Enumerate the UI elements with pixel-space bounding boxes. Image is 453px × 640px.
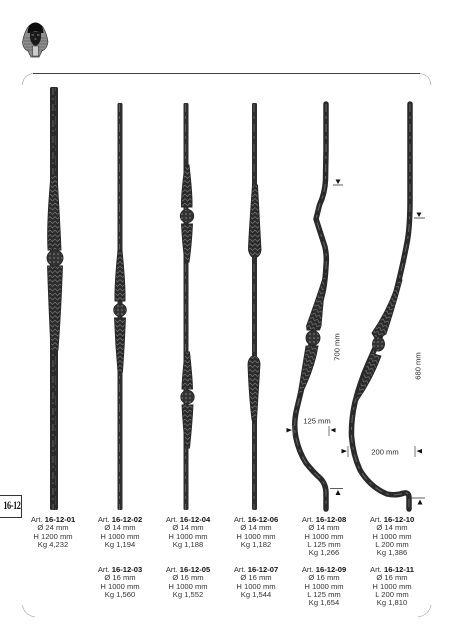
- label: 680 mm: 680 mm: [414, 352, 423, 380]
- rod 16-12-01: [47, 87, 63, 510]
- spec: 16-12-11: [370, 565, 414, 607]
- spec: 16-12-05: H 1000 mm: [168, 582, 208, 591]
- spec: 16-12-09: Art. 16-12-09: [302, 565, 346, 574]
- spec: 16-12-11: H 1000 mm: [372, 582, 412, 591]
- spec: 16-12-10: H 1000 mm: [372, 532, 412, 541]
- spec: 16-12-07: Ø 16 mm: [240, 573, 272, 582]
- spec: 16-12-11: L 200 mm: [375, 590, 409, 599]
- label: 700 mm: 700 mm: [333, 333, 342, 361]
- spec: 16-12-02: [98, 515, 142, 549]
- spec: 16-12-01: [31, 515, 75, 549]
- spec: 16-12-11: Art. 16-12-11: [370, 565, 414, 574]
- spec: 16-12-03: Ø 16 mm: [104, 573, 136, 582]
- spec: 16-12-06: Ø 14 mm: [240, 523, 272, 532]
- spec: 16-12-08: Kg 1,266: [309, 548, 339, 557]
- dimension marks: rod 08 height: [330, 180, 343, 495]
- spec: 16-12-11: Kg 1,810: [377, 598, 407, 607]
- spec: 16-12-10: L 200 mm: [375, 540, 409, 549]
- icon: pharaoh head: [22, 22, 48, 57]
- spec: 16-12-08: [302, 515, 346, 557]
- spec: 16-12-08: H 1000 mm: [304, 532, 344, 541]
- spec: 16-12-01: Ø 24 mm: [37, 523, 69, 532]
- rod 16-12-10 curved: [351, 104, 410, 509]
- spec: 16-12-10: Art. 16-12-10: [370, 515, 414, 524]
- spec: 16-12-06: H 1000 mm: [236, 532, 276, 541]
- spec: 16-12-09: Ø 16 mm: [308, 573, 340, 582]
- rod 16-12-06: [248, 103, 261, 510]
- spec: 16-12-01: Art. 16-12-01: [31, 515, 75, 524]
- frame: top rule and rounded corners: [22, 74, 431, 617]
- spec: 16-12-09: H 1000 mm: [304, 582, 344, 591]
- spec: 16-12-03: [98, 565, 142, 599]
- spec: 16-12-02: Kg 1,194: [105, 540, 135, 549]
- label: 200 mm: 200 mm: [371, 448, 399, 457]
- dimension marks: rod 10 width: [342, 446, 422, 457]
- label: 125 mm: 125 mm: [303, 417, 331, 426]
- spec: 16-12-08: Ø 14 mm: [308, 523, 340, 532]
- spec: 16-12-09: L 125 mm: [307, 590, 341, 599]
- spec: 16-12-06: [234, 515, 278, 549]
- spec: 16-12-05: Kg 1,552: [173, 590, 203, 599]
- spec: 16-12-05: Ø 16 mm: [172, 573, 204, 582]
- dimension marks: rod 08 width: [286, 425, 336, 436]
- spec: 16-12-07: Art. 16-12-07: [234, 565, 278, 574]
- spec: 16-12-10: [370, 515, 414, 557]
- spec: 16-12-09: [302, 565, 346, 607]
- spec: 16-12-04: H 1000 mm: [168, 532, 208, 541]
- spec: 16-12-05: [166, 565, 210, 599]
- page tab: 16-12: 16-12: [3, 500, 21, 512]
- page tab: 16-12: [0, 495, 22, 518]
- spec: 16-12-03: Art. 16-12-03: [98, 565, 142, 574]
- spec: 16-12-01: H 1200 mm: [33, 532, 73, 541]
- spec: 16-12-04: Ø 14 mm: [172, 523, 204, 532]
- spec: 16-12-10: Kg 1,386: [377, 548, 407, 557]
- spec: 16-12-06: Art. 16-12-06: [234, 515, 278, 524]
- spec: 16-12-11: Ø 16 mm: [376, 573, 408, 582]
- spec: 16-12-07: H 1000 mm: [236, 582, 276, 591]
- spec: 16-12-07: [234, 565, 278, 599]
- spec: 16-12-08: Art. 16-12-08: [302, 515, 346, 524]
- spec: 16-12-05: Art. 16-12-05: [166, 565, 210, 574]
- spec: 16-12-02: Ø 14 mm: [104, 523, 136, 532]
- rod 16-12-08 curved: [295, 104, 326, 509]
- spec: 16-12-06: Kg 1,182: [241, 540, 271, 549]
- spec: 16-12-03: H 1000 mm: [100, 582, 140, 591]
- spec: 16-12-09: Kg 1,654: [309, 598, 339, 607]
- rod 16-12-04: [180, 103, 194, 510]
- spec: 16-12-08: L 125 mm: [307, 540, 341, 549]
- rod 16-12-02: [114, 103, 126, 510]
- spec: 16-12-04: Art. 16-12-04: [166, 515, 210, 524]
- spec: 16-12-10: Ø 14 mm: [376, 523, 408, 532]
- spec: 16-12-02: H 1000 mm: [100, 532, 140, 541]
- spec: 16-12-07: Kg 1,544: [241, 590, 271, 599]
- spec: 16-12-03: Kg 1,560: [105, 590, 135, 599]
- dimension marks: rod 10 height: [412, 212, 425, 504]
- spec: 16-12-04: [166, 515, 210, 549]
- spec: 16-12-04: Kg 1,188: [173, 540, 203, 549]
- spec: 16-12-02: Art. 16-12-02: [98, 515, 142, 524]
- spec: 16-12-01: Kg 4,232: [38, 540, 68, 549]
